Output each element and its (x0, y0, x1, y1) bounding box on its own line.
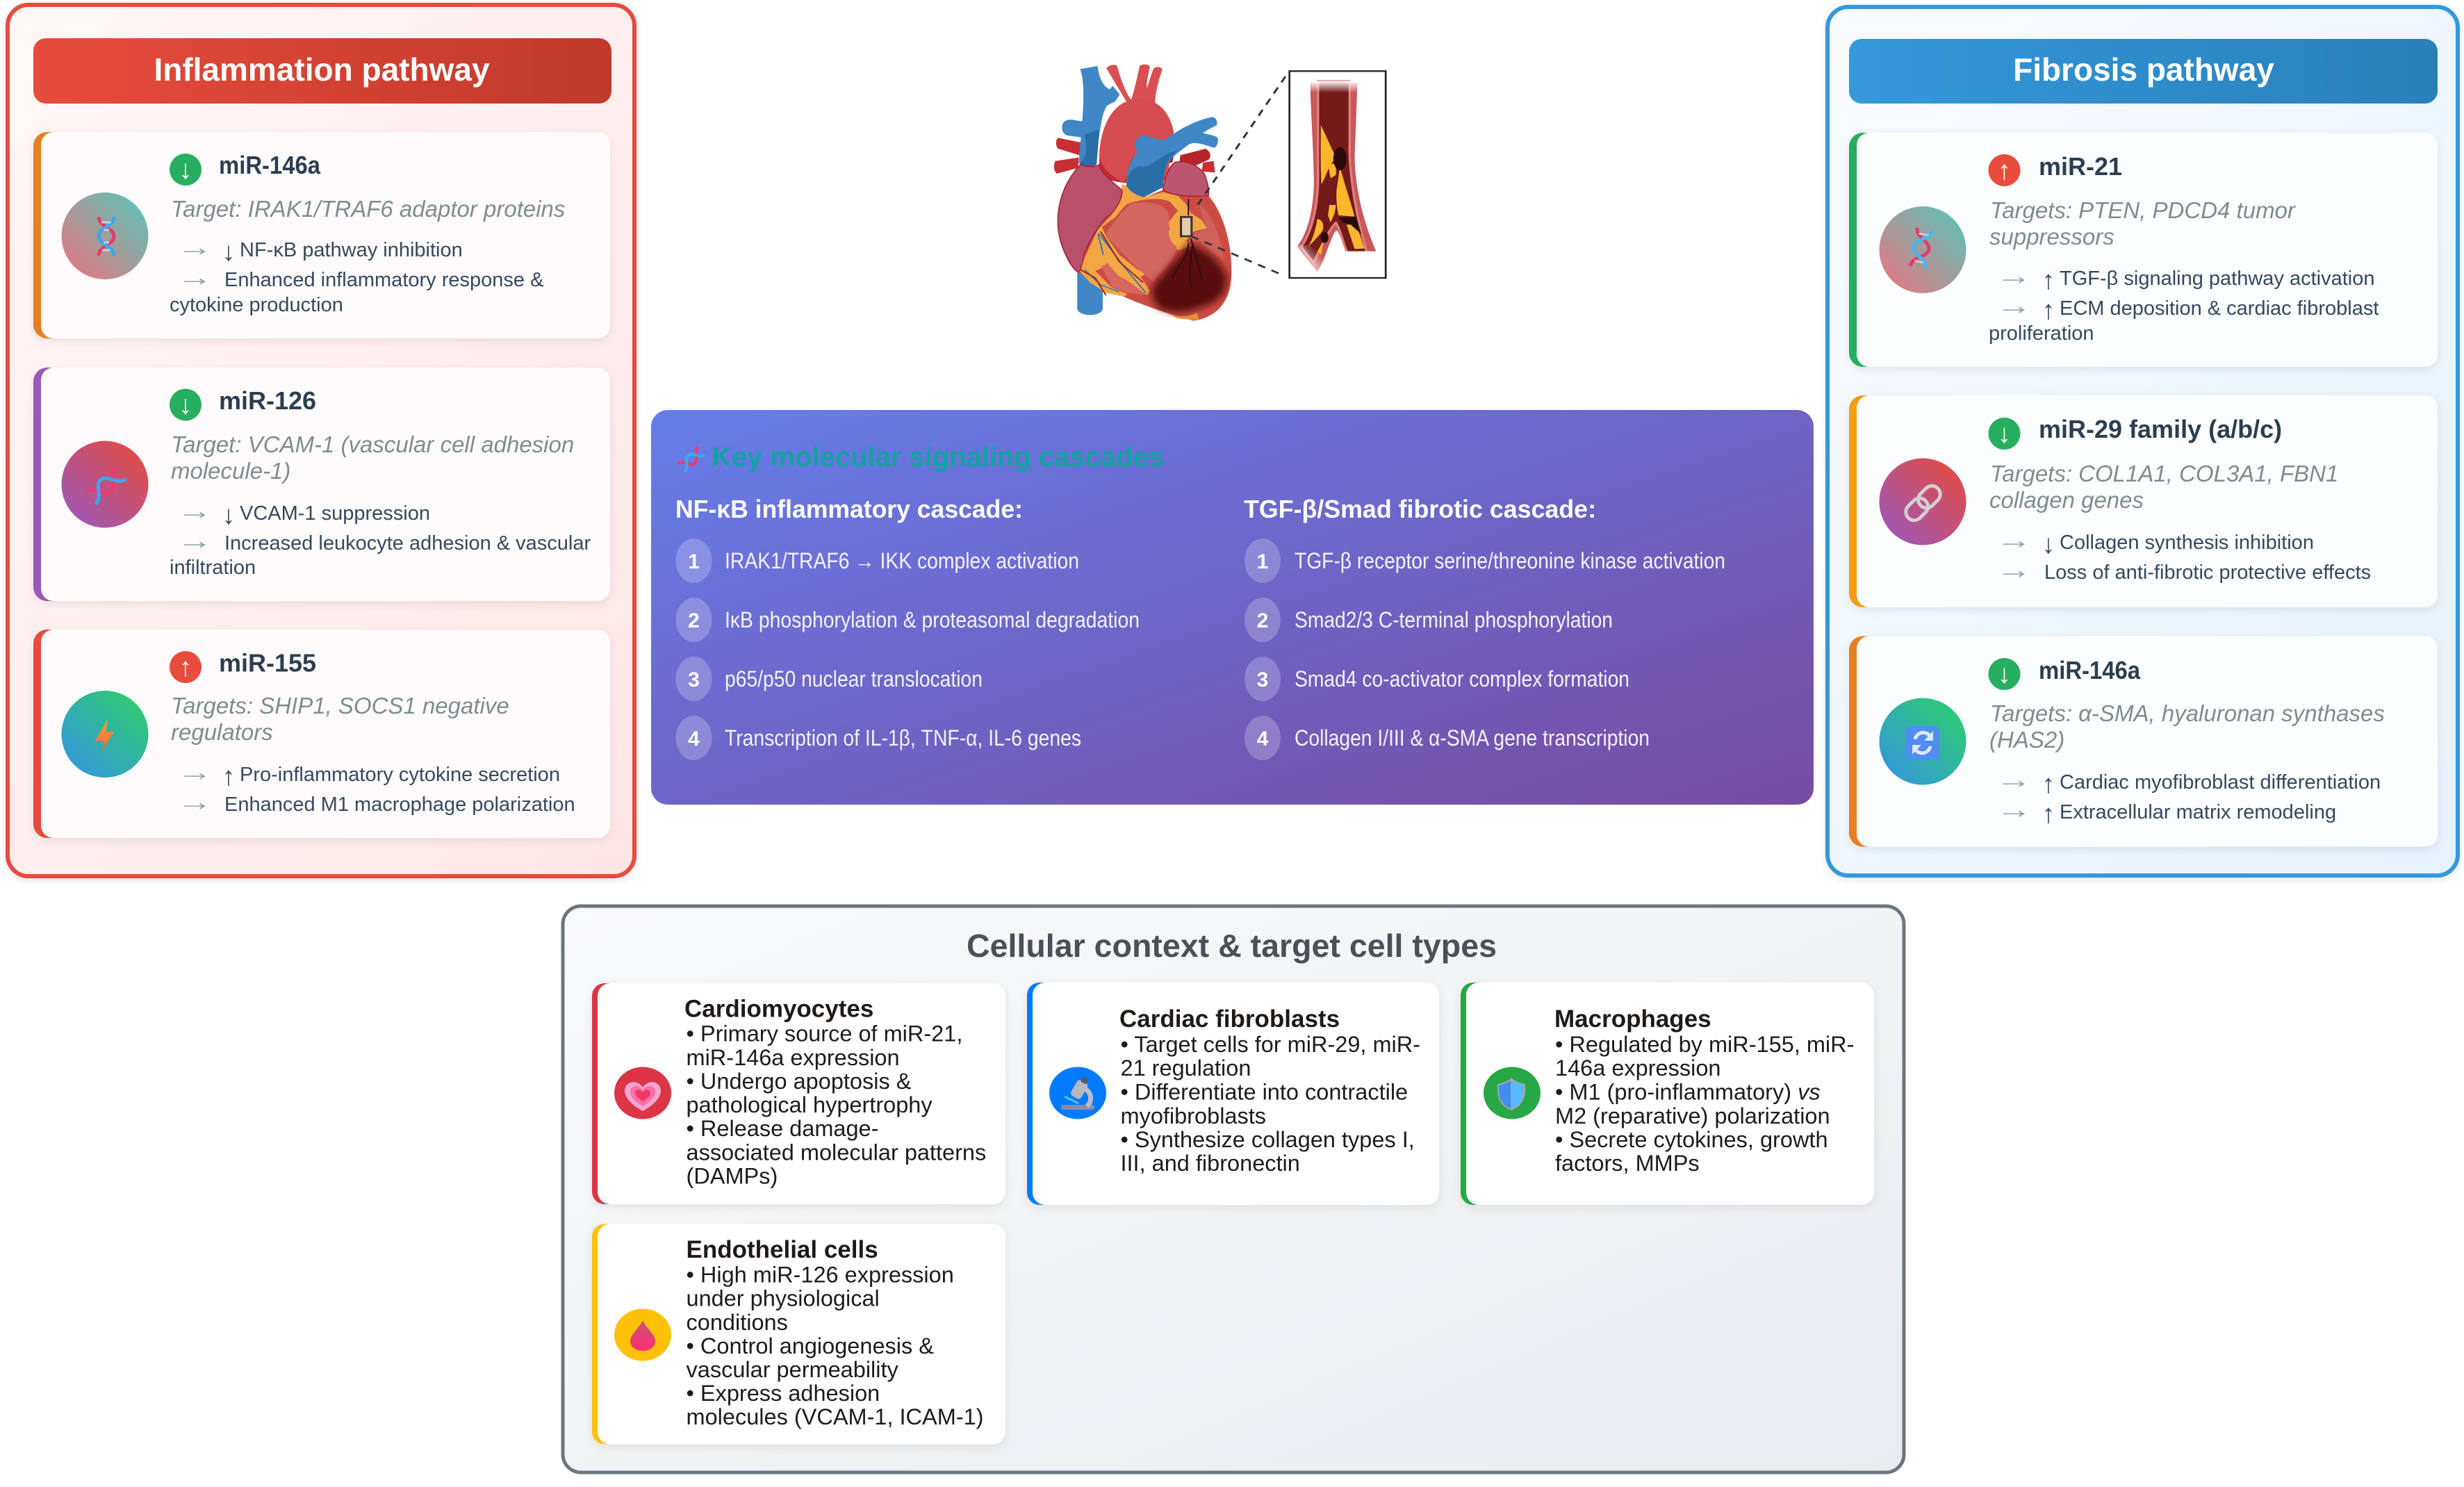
step 3 (675, 657, 983, 701)
step 1: TGF-β receptor serine/threonine kinase activation (1295, 548, 1725, 573)
effects: miR-21: ECM deposition & cardiac fibroblast (2060, 297, 2379, 320)
heading: fibrosis pathway: Fibrosis pathway (2013, 51, 2274, 88)
card: miR-146a inflammation (33, 132, 610, 338)
effects: miR-155: → (176, 787, 213, 816)
effects: miR-146a inflammation: ↓ (222, 238, 235, 267)
target: PTEN, PDCD4: Targets: PTEN, PDCD4 tumor (1990, 197, 2297, 223)
effects: miR-155: Pro-inflammatory cytokine secretion (240, 764, 560, 786)
badge: up-regulated (170, 651, 202, 683)
panel: cellular context and target cell types (563, 906, 1904, 1472)
step 2: IκB phosphorylation & proteasomal degradation (725, 607, 1140, 632)
effects: miR-155 (176, 757, 575, 816)
effects: miR-146a fibrosis: Extracellular matrix remodeling (2060, 801, 2336, 823)
target: SHIP1, SOCS1: regulators (171, 719, 273, 745)
text: macrophages: factors, MMPs (1555, 1151, 1700, 1176)
icon: lightning on green circle (61, 691, 149, 778)
step 2: 2 (1257, 609, 1268, 632)
column: NF-κB inflammatory cascade (675, 495, 1140, 760)
effects: miR-146a inflammation: Enhanced inflammatory response & (224, 269, 543, 291)
effects: miR-29 family: ↓ (2042, 530, 2055, 559)
effects: miR-126: VCAM-1 suppression (240, 502, 430, 525)
name: miR-21: miR-21 (2039, 152, 2122, 181)
target: α-SMA, hyaluronan synthases: (HAS2) (1989, 727, 2064, 753)
heading: fibrosis pathway (1849, 39, 2438, 104)
effects: miR-29 family: → (1996, 555, 2032, 584)
text: cardiac fibroblasts: myofibroblasts (1120, 1103, 1266, 1128)
text: cardiomyocytes: pathological hypertrophy (687, 1092, 933, 1117)
target: COL1A1, COL3A1, FBN1: collagen genes (1989, 487, 2144, 513)
name: miR-126: miR-126 (219, 386, 316, 415)
target: PTEN, PDCD4: suppressors (1989, 224, 2114, 249)
card: miR-155 (33, 630, 610, 838)
target: PTEN, PDCD4 (1989, 197, 2297, 249)
heading: key molecular signaling cascades: Key molecular signaling cascades (712, 442, 1164, 473)
text: endothelial cells: • Express adhesion (687, 1381, 880, 1406)
text: macrophages: • Secrete cytokines, growth (1555, 1127, 1828, 1152)
text: endothelial cells: vascular permeability (687, 1357, 899, 1382)
text: macrophages: • Regulated by miR-155, miR- (1555, 1032, 1854, 1057)
callout: dashed zoom lines (1191, 76, 1286, 276)
icon: cycle arrows on green circle (1879, 698, 1966, 785)
card: cardiomyocytes (592, 983, 1005, 1204)
step 4: 4 (688, 728, 700, 750)
icon: heart (614, 1067, 671, 1119)
effects: miR-21: TGF-β signaling pathway activation (2060, 268, 2375, 290)
icon: DNA on teal circle (1879, 206, 1966, 293)
step 3: 3 (688, 668, 700, 691)
effects: miR-146a fibrosis: ↑ (2042, 800, 2055, 829)
effects: miR-29 family: Collagen synthesis inhibition (2060, 532, 2314, 554)
step 2 (1245, 598, 1613, 642)
effects: miR-21: → (1996, 291, 2032, 320)
text: cardiac fibroblasts: • Synthesize collagen types I, (1120, 1127, 1415, 1152)
badge: down-regulated (1989, 658, 2021, 690)
effects: miR-21: ↑ (2042, 266, 2055, 295)
panel: key molecular signaling cascades (651, 410, 1814, 805)
name: miR-146a: miR-146a (2039, 656, 2141, 684)
name: miR-155: miR-155 (219, 649, 316, 677)
effects: miR-146a inflammation: → (176, 233, 213, 261)
effects: miR-126: → (176, 526, 213, 554)
step 4: 4 (1257, 728, 1269, 750)
effects: miR-21: proliferation (1989, 322, 2094, 345)
effects: miR-146a fibrosis (1996, 765, 2381, 829)
target: SHIP1, SOCS1: Targets: SHIP1, SOCS1 negative (171, 693, 509, 718)
effects: miR-126: → (176, 496, 213, 525)
target: VCAM-1 (171, 432, 574, 484)
target: α-SMA, hyaluronan synthases (1989, 700, 2385, 753)
effects: miR-155: Enhanced M1 macrophage polarization (224, 794, 575, 816)
effects: miR-29 family: → (1996, 525, 2032, 554)
text: cardiac fibroblasts: • Differentiate into contractile (1120, 1080, 1408, 1105)
effects: miR-146a inflammation (170, 233, 543, 316)
step 3: Smad4 co-activator complex formation (1295, 666, 1629, 691)
card: miR-29 family (1849, 395, 2438, 607)
effects: miR-29 family: Loss of anti-fibrotic protective effects (2044, 561, 2371, 584)
step 1: 1 (1257, 550, 1268, 573)
name: miR-29 family: miR-29 family (a/b/c) (2039, 415, 2282, 443)
text: cardiomyocytes: (DAMPs) (687, 1163, 778, 1188)
step 3: p65/p50 nuclear translocation (725, 666, 983, 691)
step 4 (675, 716, 1081, 760)
step 1: 1 (688, 550, 700, 573)
heading: inflammation pathway: Inflammation pathway (154, 51, 490, 88)
step 2 (675, 598, 1140, 642)
step 3 (1245, 657, 1629, 701)
column: TGF-β/Smad fibrotic cascade: TGF-β/Smad fibrotic cascade: (1244, 495, 1596, 523)
effects: miR-146a inflammation: → (176, 263, 213, 291)
text: macrophages: Macrophages (1554, 1005, 1711, 1033)
target: SHIP1, SOCS1 (171, 693, 509, 745)
effects: miR-21 (1989, 261, 2379, 345)
icon: shield (1484, 1067, 1541, 1119)
panel: inflammation pathway (8, 5, 634, 876)
effects: miR-126: Increased leukocyte adhesion & vascular (224, 532, 591, 554)
text: cardiomyocytes: Cardiomyocytes (684, 995, 873, 1023)
heart (1054, 65, 1231, 321)
badge: up-regulated: ↑ (179, 653, 192, 682)
illustration: heart with occluded coronary artery inset (1054, 65, 1386, 321)
effects: miR-146a fibrosis: Cardiac myofibroblast differentiation (2060, 771, 2381, 794)
target: α-SMA, hyaluronan synthases: Targets: α-SMA, hyaluronan synthases (1990, 700, 2385, 726)
effects: miR-126: infiltration (170, 557, 256, 579)
badge: down-regulated (170, 154, 202, 186)
badge: down-regulated (170, 389, 202, 421)
text: cardiomyocytes: • Primary source of miR-21, (687, 1021, 962, 1046)
card: cardiac fibroblasts (1027, 983, 1439, 1205)
text: endothelial cells (687, 1236, 984, 1429)
card: miR-21 (1849, 133, 2438, 367)
text: cardiac fibroblasts: 21 regulation (1120, 1055, 1251, 1081)
icon: chain on purple circle (1879, 459, 1966, 545)
heading: cellular context: Cellular context & target cell types (967, 928, 1497, 964)
inset: occluded artery (1290, 71, 1386, 278)
text: endothelial cells: molecules (VCAM-1, ICAM-1) (687, 1404, 984, 1429)
step 4: Transcription of IL-1β, TNF-α, IL-6 genes (725, 725, 1081, 750)
step 3: 3 (1257, 668, 1268, 691)
effects: miR-146a fibrosis: → (1996, 795, 2032, 823)
text: cardiac fibroblasts: • Target cells for miR-29, miR- (1120, 1032, 1420, 1057)
step 1: IRAK1/TRAF6 → IKK complex activation (725, 548, 1079, 573)
icon: DNA on teal circle (61, 192, 149, 279)
name: miR-146a: miR-146a (219, 151, 321, 179)
text: endothelial cells: conditions (687, 1310, 788, 1335)
column: NF-κB inflammatory cascade: NF-κB inflammatory cascade: (675, 495, 1023, 523)
card: miR-126 (33, 368, 610, 601)
badge: down-regulated: ↓ (1998, 660, 2011, 689)
text: cardiac fibroblasts: Cardiac fibroblasts (1119, 1005, 1340, 1033)
icon: DNA on purple circle (61, 441, 149, 528)
card: macrophages (1461, 983, 1874, 1205)
column: TGF-β/Smad fibrotic cascade (1244, 495, 1725, 760)
badge: down-regulated: ↓ (179, 156, 192, 185)
text: cardiomyocytes: miR-146a expression (687, 1045, 900, 1070)
badge: down-regulated: ↓ (179, 391, 192, 420)
effects: miR-21: → (1996, 261, 2032, 290)
effects: miR-126 (170, 496, 591, 579)
effects: miR-146a inflammation: NF-κB pathway inhibition (240, 239, 463, 261)
step 4 (1245, 716, 1650, 760)
step 2: Smad2/3 C-terminal phosphorylation (1295, 607, 1613, 632)
target: IRAK1/TRAF6: Target: IRAK1/TRAF6 adaptor proteins (171, 196, 565, 222)
effects: miR-21: ↑ (2042, 296, 2055, 325)
heading: inflammation pathway (33, 38, 611, 104)
target: COL1A1, COL3A1, FBN1 (1989, 461, 2338, 513)
badge: up-regulated: ↑ (1998, 156, 2011, 186)
card: endothelial cells (592, 1224, 1005, 1444)
step 1 (1245, 539, 1725, 583)
text: cardiomyocytes: • Release damage- (687, 1116, 878, 1141)
step 2: 2 (688, 609, 700, 632)
target: VCAM-1: Target: VCAM-1 (vascular cell adhesion (171, 432, 574, 457)
effects: miR-146a inflammation: cytokine production (170, 294, 343, 316)
effects: miR-29 family (1996, 525, 2371, 584)
step 1 (675, 539, 1079, 583)
text: macrophages: M2 (reparative) polarization (1555, 1103, 1830, 1128)
text: cardiac fibroblasts (1119, 1005, 1420, 1176)
badge: up-regulated (1989, 154, 2021, 186)
badge: down-regulated (1989, 418, 2021, 450)
text: cardiac fibroblasts: III, and fibronectin (1120, 1151, 1300, 1176)
text: macrophages (1554, 1005, 1854, 1176)
text: macrophages: 146a expression (1555, 1055, 1720, 1081)
badge: down-regulated: ↓ (1998, 420, 2011, 449)
card: miR-146a fibrosis (1849, 636, 2438, 846)
icon: microscope (1049, 1067, 1106, 1119)
text: cardiomyocytes (684, 995, 986, 1188)
text: cardiomyocytes: associated molecular patterns (687, 1140, 986, 1165)
step 4: Collagen I/III & α-SMA gene transcription (1295, 725, 1650, 750)
target: COL1A1, COL3A1, FBN1: Targets: COL1A1, COL3A1, FBN1 (1990, 461, 2338, 486)
panel: fibrosis pathway (1828, 7, 2458, 876)
text: endothelial cells: Endothelial cells (687, 1236, 878, 1263)
effects: miR-146a fibrosis: ↑ (2042, 770, 2055, 799)
text: endothelial cells: • High miR-126 expression (687, 1263, 954, 1288)
text: endothelial cells: under physiological (687, 1286, 880, 1311)
icon: blood drop (614, 1309, 671, 1361)
effects: miR-146a fibrosis: → (1996, 765, 2032, 794)
effects: miR-126: ↓ (222, 501, 235, 530)
text: endothelial cells: • Control angiogenesis & (687, 1333, 934, 1358)
text: macrophages: • M1 (pro-inflammatory) vs (1555, 1080, 1821, 1105)
effects: miR-155: ↑ (222, 762, 235, 791)
effects: miR-155: → (176, 757, 213, 786)
text: cardiomyocytes: • Undergo apoptosis & (687, 1069, 912, 1094)
target: VCAM-1: molecule-1) (171, 458, 290, 484)
